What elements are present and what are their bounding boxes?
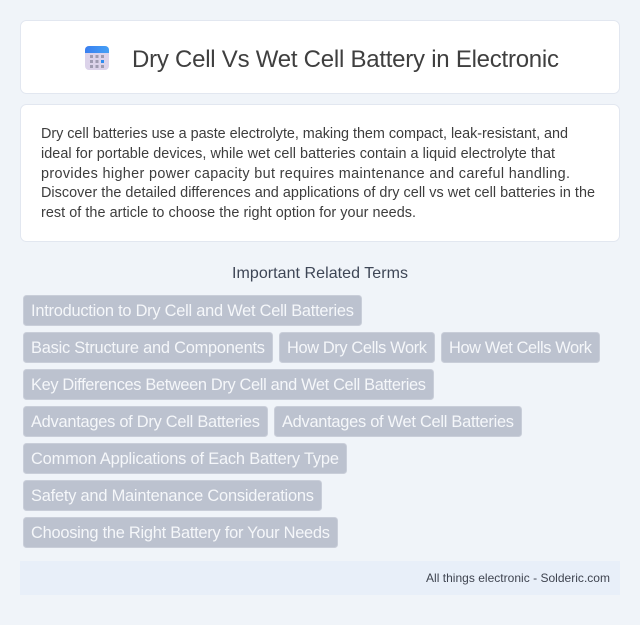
intro text: ideal for portable devices, while wet cell batteries contain a liquid electrolyte that <box>41 146 555 162</box>
tag <box>24 518 338 548</box>
tag: Basic Structure and Components <box>31 339 265 357</box>
icon: calendar <box>85 46 109 70</box>
intro text: provides higher power capacity but requires maintenance and careful handling. <box>41 166 570 182</box>
panel: introduction <box>20 104 620 242</box>
intro text: Discover the detailed differences and applications of dry cell vs wet cell batteries in the <box>41 185 595 201</box>
tag: Advantages of Wet Cell Batteries <box>282 413 514 431</box>
tag: Common Applications of Each Battery Type <box>31 450 339 468</box>
intro text: rest of the article to choose the right option for your needs. <box>41 205 416 221</box>
tag list <box>24 296 600 548</box>
tag <box>24 480 322 510</box>
tag: How Wet Cells Work <box>449 339 593 357</box>
tag <box>24 370 434 400</box>
tag <box>274 406 522 436</box>
tag <box>280 332 434 362</box>
intro text <box>41 126 595 221</box>
tag <box>24 296 362 326</box>
tag: Choosing the Right Battery for Your Needs <box>31 524 330 542</box>
tag <box>24 332 272 362</box>
tag: Safety and Maintenance Considerations <box>31 487 314 505</box>
tag <box>442 332 600 362</box>
tag <box>24 406 268 436</box>
tag <box>24 444 346 474</box>
tag: Advantages of Dry Cell Batteries <box>31 413 260 431</box>
title: Dry Cell Vs Wet Cell Battery in Electronic <box>132 46 559 73</box>
tag: How Dry Cells Work <box>287 339 428 357</box>
heading: important related terms: Important Related Terms <box>232 265 408 282</box>
intro text: Dry cell batteries use a paste electrolyte, making them compact, leak-resistant, and <box>41 126 568 142</box>
tag: Introduction to Dry Cell and Wet Cell Batteries <box>31 302 354 320</box>
tag: Key Differences Between Dry Cell and Wet Cell Batteries <box>31 376 426 394</box>
footer <box>20 561 620 595</box>
header panel <box>20 20 620 94</box>
footer: All things electronic - Solderic.com <box>426 571 610 585</box>
